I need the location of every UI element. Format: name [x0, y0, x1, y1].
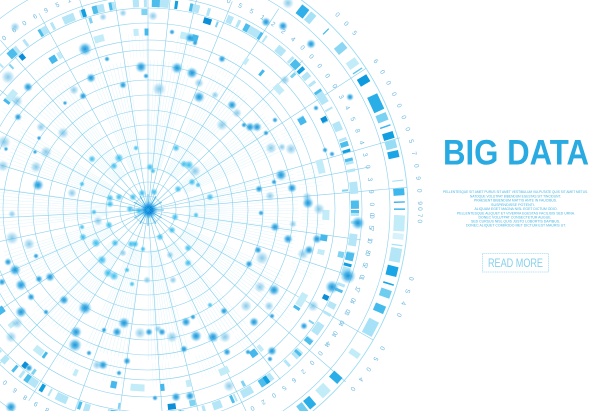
digits: outer arc mid upper: 0 0 5: [336, 12, 358, 35]
body text block: PELLENTESQUE ALIQUET ET VIVERRA EGESTAS FACILISIS SED URNA.: [457, 211, 575, 215]
data band r178: [0, 32, 326, 388]
central hub dot: [140, 201, 158, 219]
radial spokes: [0, 0, 407, 411]
cyan inner dots: [79, 144, 214, 308]
body text block: NATOQUE VOLUTPAT BIBENDUM EGESTAS SIT TINCIDUNT.: [470, 194, 561, 198]
outer data band blocks: [296, 4, 405, 411]
body text block: ALIQUAM EGET MAGNA NISL EGET DICTUM ODIO.: [474, 207, 558, 211]
fine radial hatch: [0, 45, 313, 375]
body text block: DONEC VOLUTPAT CONSECTETUR AUGUE.: [478, 215, 552, 219]
body text block: [443, 190, 588, 228]
data band r198: [0, 12, 346, 408]
pale scatter dots: [0, 0, 325, 392]
title: BIG DATA: [443, 134, 589, 172]
body text block: SUSPENDISSE POTENTI.: [491, 203, 535, 207]
read more button: [482, 254, 548, 272]
body text block: SED CURSUS NISL QUIS JUSTO LOBORTIS DAPIBUS.: [471, 219, 560, 223]
radial data wheel: [0, 0, 422, 411]
digits: outer arc right: 6 0 0 0 0 0 0 5 7 0 9 0 9 7: [374, 59, 422, 218]
body text block: PELLENTESQUE SIT AMET PURUS SIT AMET VESTIBULUM VULPUTATE QUIS SIT AMET METUS.: [443, 190, 588, 194]
strong scatter dots: [0, 17, 365, 411]
body text block: DONEC ALIQUET COMMODO MET DICTUM EST MAURIS UT.: [466, 224, 566, 228]
read more button: READ MORE: [488, 256, 543, 270]
digits: outer arc lower: 0 S 4 0: [397, 277, 414, 317]
hub spokes: [132, 194, 164, 226]
digits: outer arc right centre: 0 0: [418, 207, 422, 223]
concentric rings: [0, 0, 408, 411]
body text block: PRAESENT BIBENDUM MATTIS ANTE IN FAUCIBUS.: [474, 199, 557, 203]
digits: outer arc lower end: 0 5 0 4 0: [351, 346, 385, 391]
digit arcs: [2, 0, 422, 411]
data band r207: [0, 3, 355, 411]
